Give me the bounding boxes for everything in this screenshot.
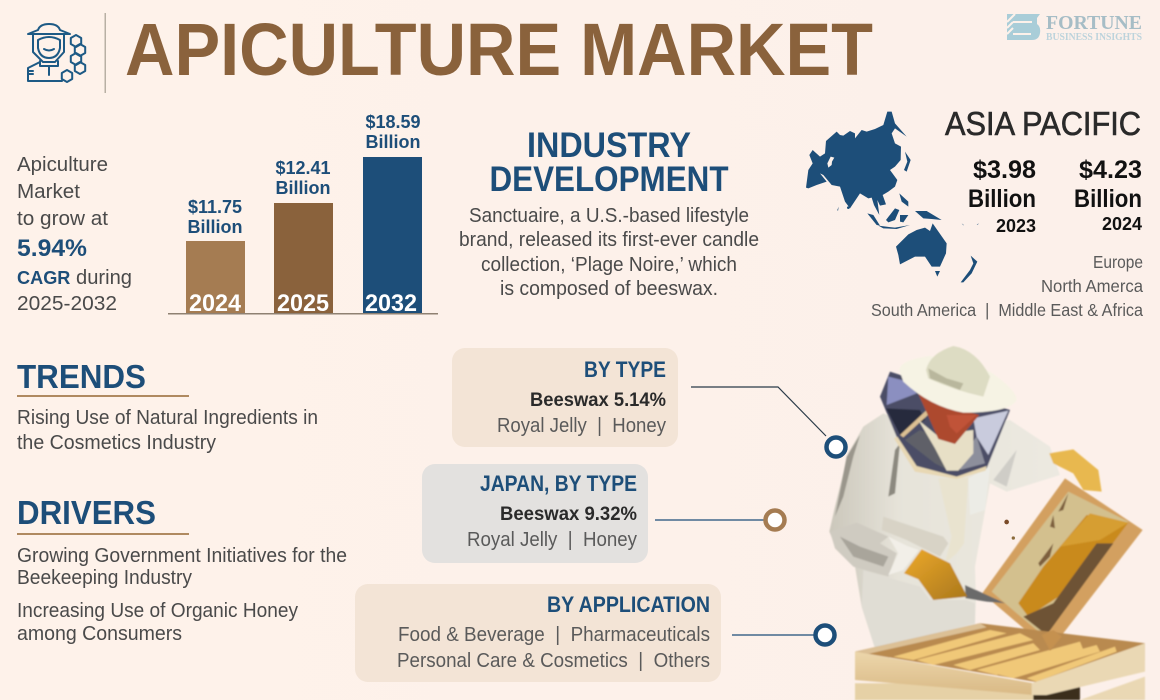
bar chart: market size: Billion	[188, 217, 242, 237]
text block: industry development: is composed of beeswax.	[500, 278, 718, 300]
text block: CAGR statement: Apiculture	[17, 154, 108, 176]
illustration: beekeeper inspecting hive frame	[829, 346, 1145, 700]
text block: industry development: Sanctuaire, a U.S.-based lifestyle	[469, 205, 749, 227]
text block: other regions: North Amerca	[1041, 276, 1143, 296]
panel: by type: BY TYPE	[584, 357, 666, 382]
text block: CAGR statement: 2025-2032	[17, 293, 117, 315]
connector: Japan by type	[655, 510, 784, 530]
panel: Japan by type	[422, 464, 648, 563]
section: trends	[17, 358, 318, 454]
text block: industry development	[459, 205, 759, 300]
stat: 2024: 2024	[1102, 214, 1142, 234]
panel: by application: BY APPLICATION	[547, 592, 710, 617]
gloves and knife	[965, 585, 1005, 603]
section: trends: the Cosmetics Industry	[17, 432, 216, 454]
section: drivers: DRIVERS	[17, 494, 156, 531]
suit	[829, 413, 1060, 648]
panel: Japan by type: Beeswax 9.32%	[500, 504, 637, 525]
frame	[982, 478, 1143, 651]
map: Asia Pacific	[806, 112, 979, 282]
panel: by type: Beeswax 5.14%	[530, 390, 666, 411]
stat: 2023: Billion	[968, 185, 1036, 213]
text block: industry development: collection, ‘Plage Noire,’ which	[481, 254, 737, 276]
bar chart: market size: Billion	[366, 132, 420, 152]
heading: industry development: DEVELOPMENT	[490, 160, 728, 199]
bar chart: market size: 2024	[189, 290, 242, 317]
title: APICULTURE MARKET	[125, 8, 873, 91]
panel: by application: Food & Beverage | Pharmaceuticals	[398, 624, 710, 646]
text block: other regions: Europe	[1093, 252, 1143, 272]
logo: Fortune Business Insights	[1007, 12, 1142, 43]
bar chart: market size: $11.75	[188, 197, 242, 217]
stat: 2023: 2023	[996, 216, 1036, 236]
falling bees	[1004, 520, 1015, 540]
collar and face	[918, 420, 973, 471]
text block: industry development: brand, released its first-ever candle	[459, 229, 759, 251]
hat	[899, 356, 1017, 413]
hive box	[855, 683, 1033, 700]
bar chart: market size: 2025	[277, 290, 329, 317]
logo: Fortune Business Insights: BUSINESS INSIGHTS	[1046, 32, 1142, 43]
connector: by type	[691, 387, 846, 456]
heading: industry development	[490, 126, 728, 199]
text block: CAGR statement	[17, 154, 132, 315]
panel: Japan by type: JAPAN, BY TYPE	[480, 471, 637, 496]
logo: Fortune Business Insights: FORTUNE	[1046, 12, 1142, 34]
text block: CAGR statement: Market	[17, 181, 80, 203]
stat: 2023	[968, 156, 1036, 236]
panel: by type	[452, 348, 678, 447]
panel: by application	[355, 584, 721, 682]
connector: by application	[732, 626, 834, 644]
text block: CAGR statement: to grow at	[17, 208, 108, 230]
section: drivers	[17, 494, 347, 645]
stat: 2024: $4.23	[1079, 156, 1142, 184]
heading: industry development: INDUSTRY	[527, 126, 691, 165]
stat: 2024: Billion	[1074, 185, 1142, 213]
bar chart: market size: $12.41	[275, 158, 331, 178]
section: drivers: Beekeeping Industry	[17, 567, 192, 589]
section: drivers: Growing Government Initiatives for the	[17, 545, 347, 567]
bar chart: market size	[168, 112, 438, 317]
stat: 2023: $3.98	[973, 156, 1036, 184]
text block: other regions	[871, 252, 1143, 320]
section: drivers: among Consumers	[17, 623, 182, 645]
panel: Japan by type: Royal Jelly | Honey	[467, 529, 637, 551]
bar chart: market size: Billion	[276, 178, 330, 198]
panel: by application: Personal Care & Cosmetics | Others	[397, 650, 710, 672]
text block: CAGR statement: 5.94%	[17, 235, 87, 262]
text block: CAGR statement: CAGR during	[17, 267, 132, 289]
stat: 2024	[1074, 156, 1142, 234]
section: trends: Rising Use of Natural Ingredients in	[17, 407, 318, 429]
bar chart: market size: $18.59	[365, 112, 421, 132]
frame corner over hive	[1042, 630, 1062, 651]
text block: other regions: South America | Middle East & Africa	[871, 300, 1143, 320]
panel: by type: Royal Jelly | Honey	[497, 415, 666, 437]
heading: Asia Pacific: ASIA PACIFIC	[945, 105, 1141, 142]
veil	[880, 372, 1010, 477]
bar chart: market size: 2032	[365, 290, 417, 317]
icon: beekeeper with honeycomb	[28, 24, 85, 82]
section: drivers: Increasing Use of Organic Honey	[17, 600, 298, 622]
section: trends: TRENDS	[17, 358, 146, 395]
header divider	[104, 13, 106, 93]
